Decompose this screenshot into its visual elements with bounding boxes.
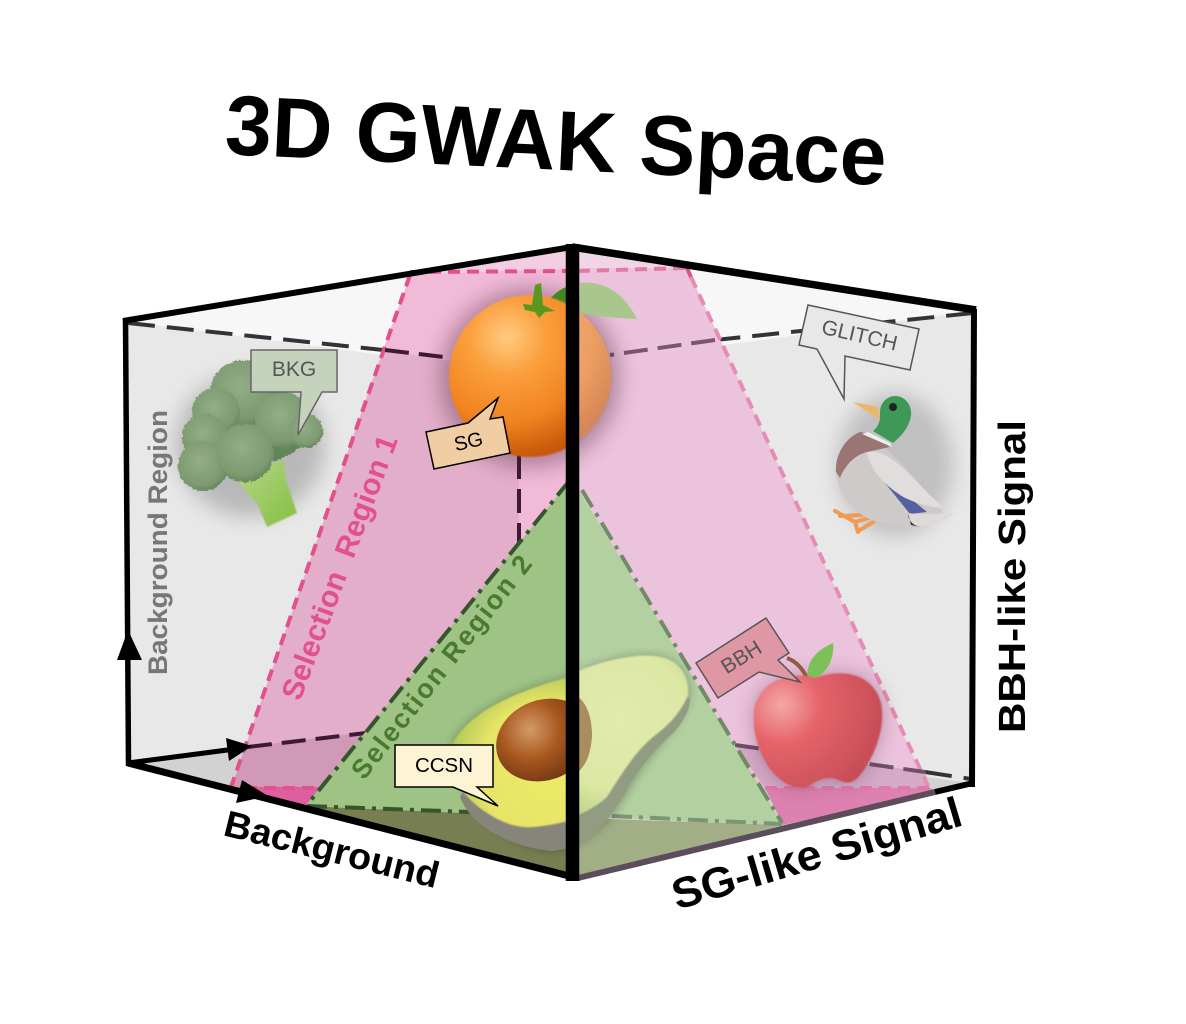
icon: broccoli (175, 360, 325, 527)
panel: selection region 1 (231, 250, 935, 825)
callout: BKG: BKG (272, 358, 316, 381)
label: BBH-like Signal: BBH-like Signal (992, 420, 1034, 733)
callout: GLITCH: GLITCH (819, 316, 900, 356)
callout: BKG (251, 350, 337, 435)
callout: BBH (696, 618, 800, 698)
front edges of the cube (123, 244, 976, 881)
arrow: front floor axis (236, 780, 268, 803)
title: 3D GWAK Space (223, 78, 889, 204)
label: SG-like Signal axis: SG-like Signal (666, 788, 967, 920)
callout: BBH: BBH (717, 636, 766, 679)
3D cube: walls and floor (125, 246, 973, 878)
back edges of the cube (128, 313, 973, 779)
icon: apple (754, 643, 882, 788)
label: Background Region: Background Region (143, 410, 173, 675)
icon: orange (440, 283, 637, 468)
callout: SG: SG (452, 428, 485, 456)
arrow: back floor axis (128, 738, 252, 763)
callout: GLITCH (799, 305, 919, 399)
icon: avocado (452, 656, 690, 851)
icon: duck (835, 393, 954, 537)
panel: selection region 2 (305, 478, 783, 878)
label: Selection Region 1: Selection Region 1 (276, 431, 405, 704)
back edges seen through region 1 (248, 340, 925, 772)
callout: CCSN (395, 745, 498, 806)
callout: CCSN: CCSN (415, 754, 473, 777)
label: Background axis: Background (220, 803, 443, 896)
callout: SG (426, 398, 510, 469)
label: Selection Region 2: Selection Region 2 (345, 550, 538, 785)
arrow: vertical axis (117, 630, 142, 660)
